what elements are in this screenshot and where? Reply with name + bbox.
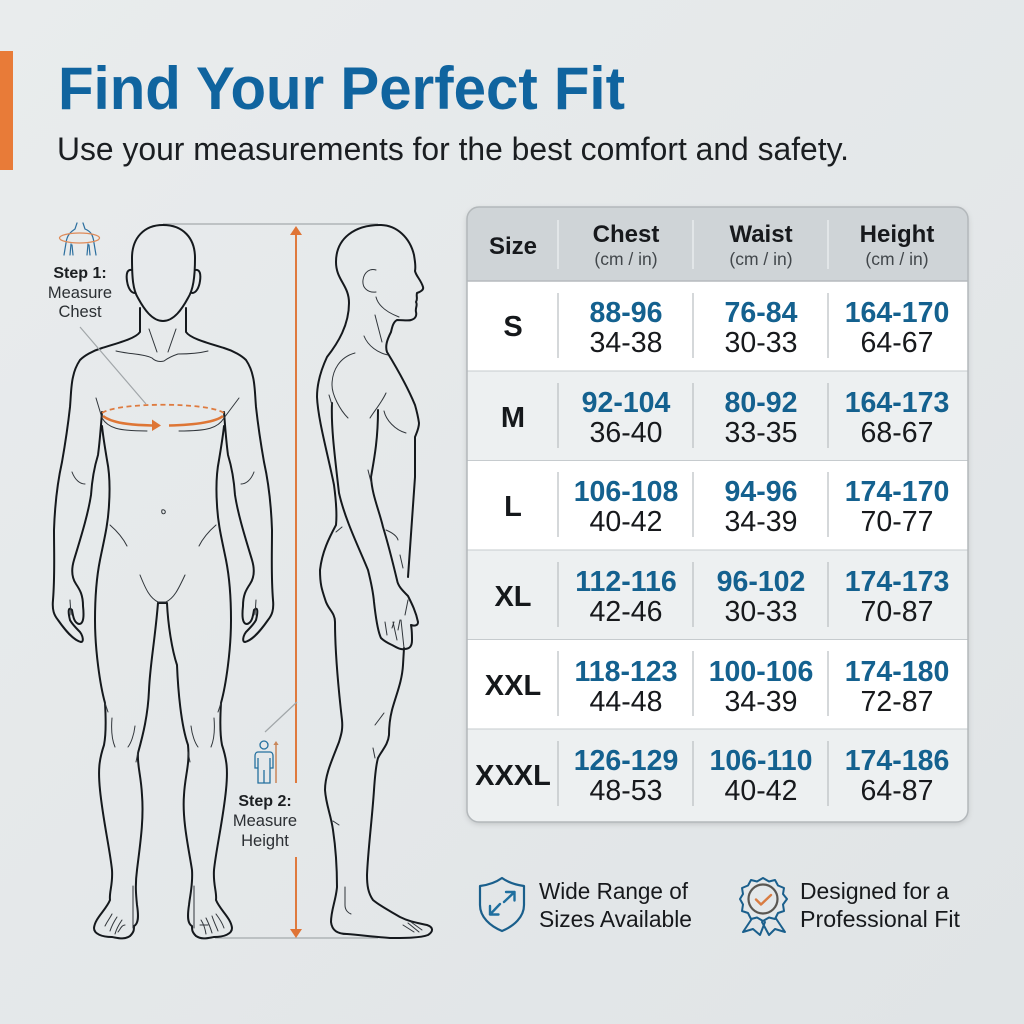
ears bbox=[127, 270, 200, 293]
row L: 40-42 bbox=[590, 506, 662, 538]
row XXXL: 40-42 bbox=[725, 775, 797, 807]
step 2 label bbox=[233, 793, 297, 850]
row XL: 112-116 bbox=[575, 566, 677, 598]
row XXXL: 174-186 bbox=[845, 745, 949, 777]
head bbox=[132, 225, 195, 321]
table header: (cm / in) bbox=[865, 249, 929, 269]
step 2 label: Step 2: bbox=[238, 793, 292, 810]
row L: 94-96 bbox=[725, 476, 797, 508]
row XL: 174-173 bbox=[845, 566, 949, 598]
icon: shield with arrows bbox=[480, 878, 524, 931]
row XL: 70-87 bbox=[861, 596, 933, 628]
table header: Waist bbox=[729, 221, 793, 248]
row M bbox=[501, 387, 949, 449]
feature text: wide range: Wide Range of bbox=[539, 878, 689, 904]
step 2 label: Height bbox=[241, 832, 289, 850]
subtitle: Use your measurements for the best comfort and safety. bbox=[57, 131, 849, 167]
step 1 label: Step 1: bbox=[53, 265, 107, 282]
feature text: wide range bbox=[539, 878, 692, 932]
row XXL: XXL bbox=[485, 670, 541, 702]
row S: 64-67 bbox=[861, 327, 933, 359]
row XXXL: 126-129 bbox=[574, 745, 678, 777]
table header: Height bbox=[860, 221, 934, 248]
row S: 34-38 bbox=[590, 327, 662, 359]
step 1 label bbox=[48, 265, 112, 321]
icon: chest measure bbox=[60, 223, 100, 255]
row M: 80-92 bbox=[725, 387, 797, 419]
size chart table bbox=[467, 207, 968, 822]
side body figure bbox=[317, 225, 432, 938]
row XL: XL bbox=[494, 581, 532, 613]
row L: 34-39 bbox=[725, 506, 797, 538]
row XXL: 44-48 bbox=[590, 686, 662, 718]
feature text: professional fit: Professional Fit bbox=[800, 906, 961, 932]
row XL: 42-46 bbox=[590, 596, 662, 628]
row XXL: 34-39 bbox=[725, 686, 797, 718]
row S: 76-84 bbox=[725, 297, 798, 329]
icon: rosette badge bbox=[740, 878, 787, 935]
title: Find Your Perfect Fit bbox=[58, 55, 625, 122]
table header: Size bbox=[489, 233, 537, 260]
row XXL: 118-123 bbox=[574, 656, 678, 688]
row XL bbox=[494, 566, 949, 628]
row M: 164-173 bbox=[845, 387, 949, 419]
step 2 label: Measure bbox=[233, 812, 297, 830]
row L: 174-170 bbox=[845, 476, 949, 508]
accent bar bbox=[0, 51, 13, 170]
row XXL: 72-87 bbox=[861, 686, 933, 718]
row S: 30-33 bbox=[725, 327, 797, 359]
feature text: professional fit bbox=[800, 878, 961, 932]
chest measuring tape bbox=[102, 405, 224, 431]
side outline, head and back bbox=[317, 225, 432, 938]
row XXL bbox=[485, 656, 949, 718]
row L: 70-77 bbox=[861, 506, 933, 538]
step 1 label: Measure bbox=[48, 284, 112, 302]
row S: S bbox=[503, 311, 523, 343]
table header: Chest bbox=[593, 221, 659, 248]
feature text: professional fit: Designed for a bbox=[800, 878, 949, 904]
row S: 88-96 bbox=[590, 297, 662, 329]
row XL: 96-102 bbox=[717, 566, 805, 598]
row M: 36-40 bbox=[590, 417, 662, 449]
chest leader line bbox=[80, 327, 146, 404]
row XXXL bbox=[475, 745, 949, 807]
row XXXL: 64-87 bbox=[861, 775, 933, 807]
row XXL: 174-180 bbox=[845, 656, 949, 688]
feature text: wide range: Sizes Available bbox=[539, 906, 692, 932]
icon: height measure bbox=[255, 741, 279, 783]
row XXXL: XXXL bbox=[475, 760, 551, 792]
muscle and anatomy detail lines bbox=[70, 329, 256, 934]
table card bbox=[467, 207, 968, 822]
table header: (cm / in) bbox=[729, 249, 793, 269]
height leader line bbox=[265, 702, 297, 732]
side arm bbox=[332, 403, 418, 649]
left torso and leg bbox=[94, 426, 158, 938]
row M: 92-104 bbox=[582, 387, 671, 419]
row XL: 30-33 bbox=[725, 596, 797, 628]
row L: L bbox=[504, 491, 522, 523]
side face, ear and muscle detail lines bbox=[329, 269, 422, 932]
row M: 33-35 bbox=[725, 417, 797, 449]
table header: (cm / in) bbox=[594, 249, 658, 269]
row M: 68-67 bbox=[861, 417, 933, 449]
row XXXL: 106-110 bbox=[709, 745, 813, 777]
row L: 106-108 bbox=[574, 476, 678, 508]
right arm outline bbox=[186, 308, 273, 642]
step 1 label: Chest bbox=[58, 303, 102, 321]
row XXXL: 48-53 bbox=[590, 775, 662, 807]
left body outline bbox=[53, 308, 140, 642]
row M: M bbox=[501, 402, 525, 434]
row S: 164-170 bbox=[845, 297, 949, 329]
row L bbox=[504, 476, 949, 538]
table header bbox=[489, 221, 934, 269]
front body figure bbox=[53, 225, 273, 938]
crotch and right leg bbox=[158, 426, 232, 938]
row XXL: 100-106 bbox=[709, 656, 813, 688]
row S bbox=[503, 297, 949, 359]
height reference lines and arrow bbox=[163, 224, 378, 938]
